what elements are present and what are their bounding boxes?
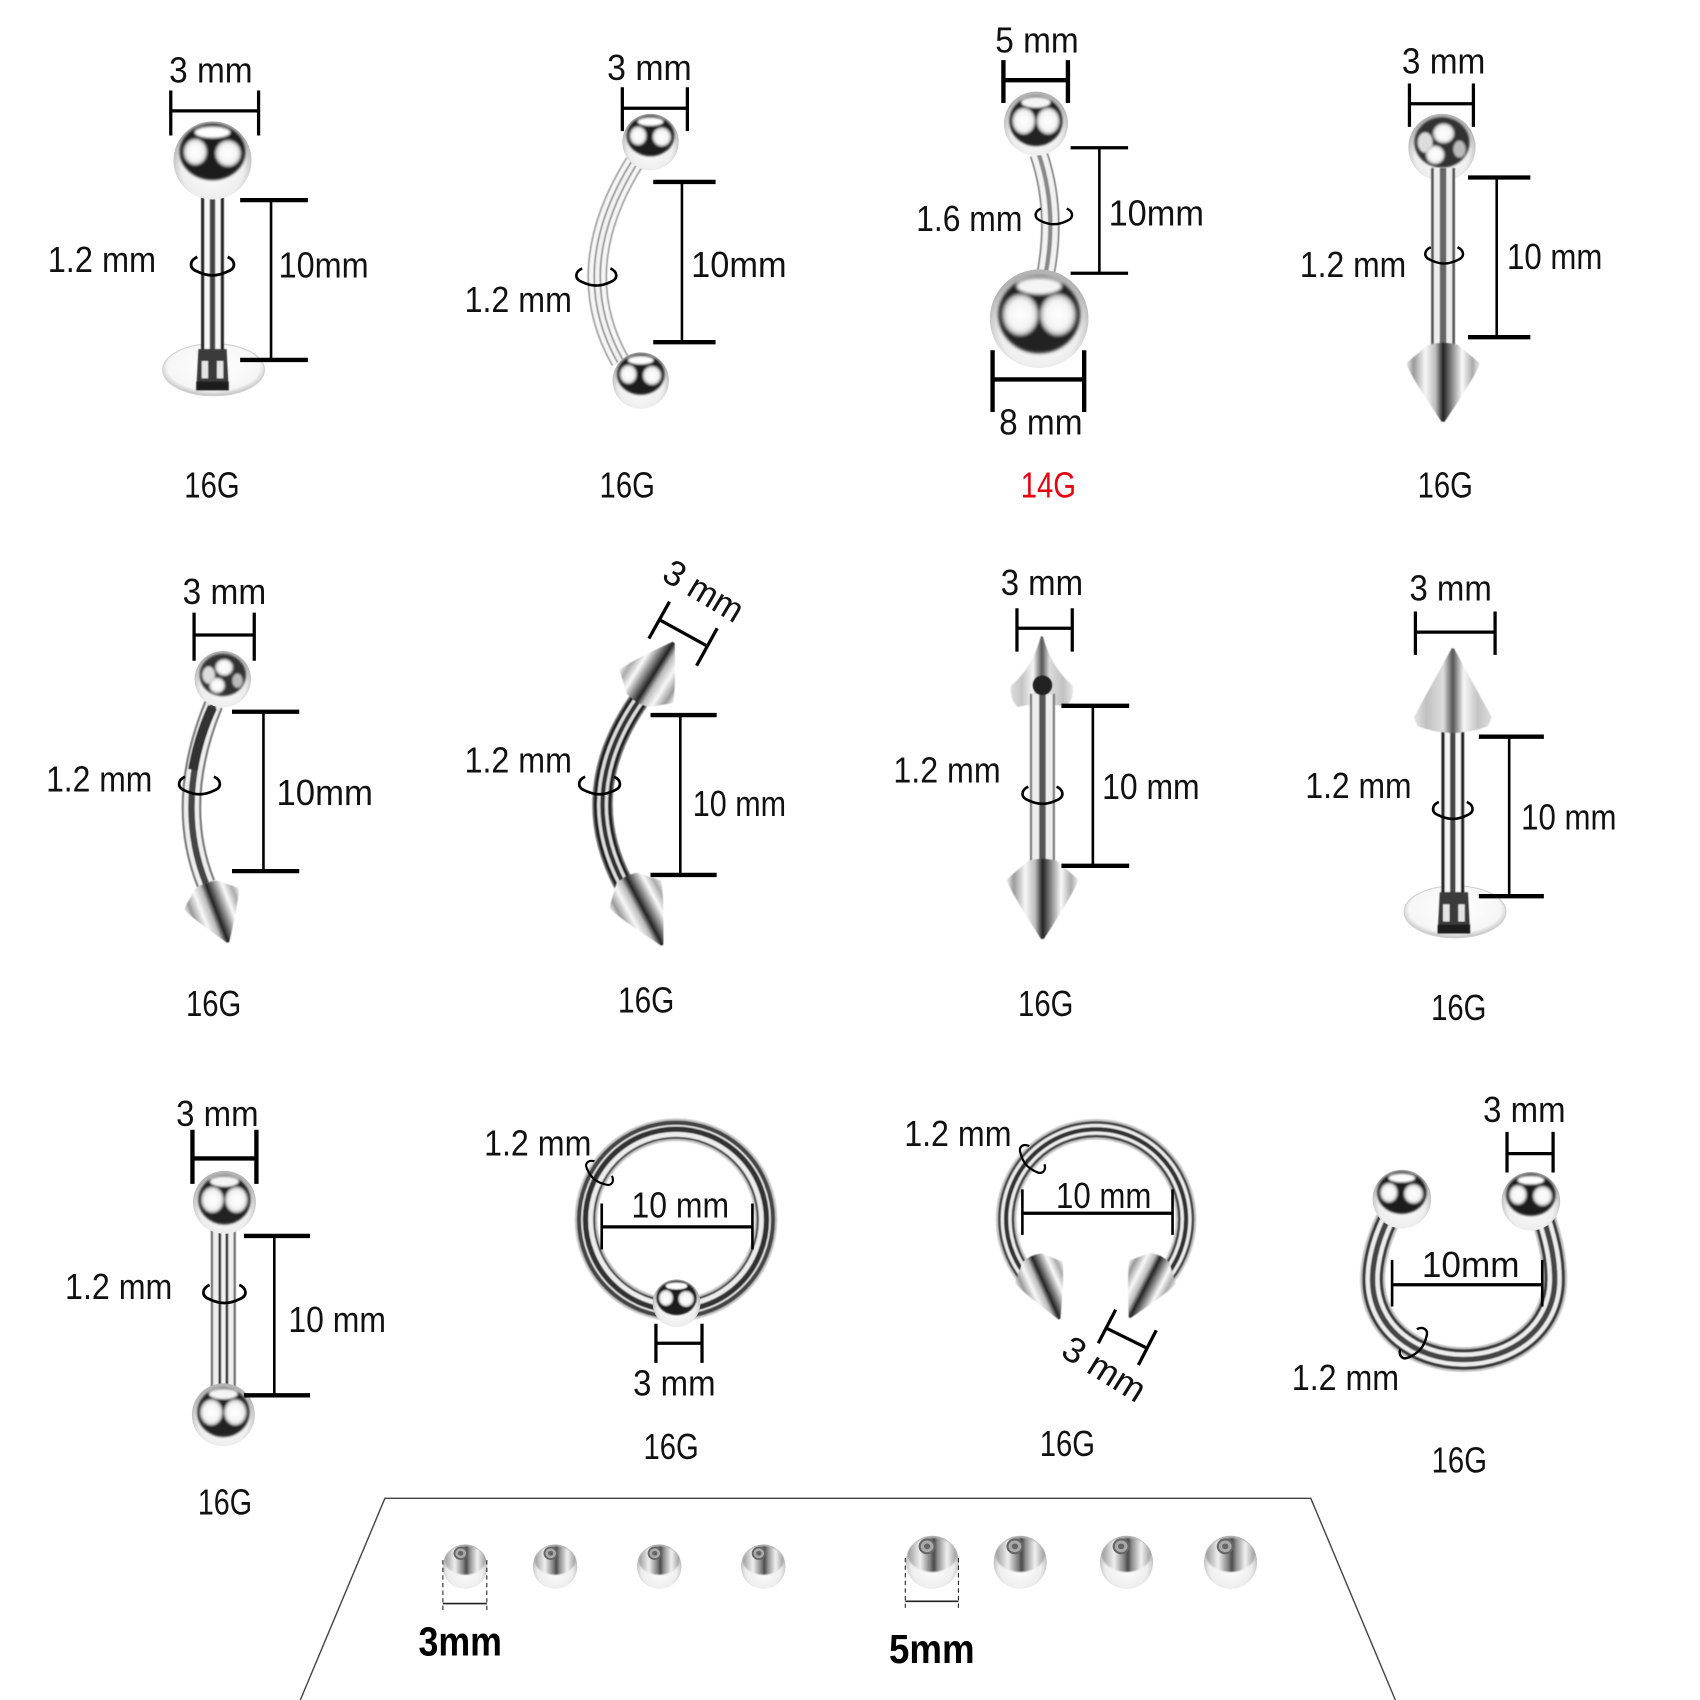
dimension 3mm	[192, 1130, 256, 1184]
top spike	[1011, 636, 1073, 707]
curved bar	[191, 705, 214, 884]
gauge: 16G	[643, 1427, 699, 1467]
gauge: 16G	[1432, 1440, 1487, 1480]
label 1.2mm: 1.2 mm	[48, 240, 156, 280]
label 5mm: 5mm	[889, 1626, 975, 1672]
item: captive bead ring 16G	[484, 1124, 767, 1467]
dimension 3mm	[171, 91, 259, 136]
label 1.2mm: 1.2 mm	[484, 1124, 591, 1164]
bar	[202, 193, 223, 358]
label 10mm: 10 mm	[1507, 237, 1602, 277]
dimension 3mm	[194, 613, 254, 661]
label 3mm: 3 mm	[176, 1094, 259, 1134]
label 10mm: 10 mm	[1056, 1176, 1151, 1216]
gauge: 16G	[1431, 988, 1486, 1028]
label 1.2mm: 1.2 mm	[893, 750, 1001, 790]
gauge: 16G	[198, 1483, 252, 1523]
label 10mm: 10 mm	[1521, 797, 1617, 837]
dimension 10mm	[1468, 177, 1530, 337]
item: curved ball and spike 16G	[46, 572, 373, 1024]
label 10mm: 10mm	[276, 773, 373, 813]
top ball	[1004, 92, 1068, 156]
spike	[1414, 648, 1492, 733]
spike	[1406, 343, 1480, 422]
dimension 3mm	[1017, 608, 1072, 652]
ring marker	[203, 1285, 245, 1303]
dimension 8mm	[993, 350, 1084, 412]
gauge 14G red: 14G	[1021, 466, 1076, 506]
label 1.2mm: 1.2 mm	[1292, 1358, 1399, 1398]
ring marker	[1397, 1325, 1432, 1363]
bottom ball	[613, 352, 669, 409]
dimension 3mm	[656, 1324, 702, 1363]
label 1.2mm: 1.2 mm	[65, 1267, 172, 1307]
item: curved double spike 16G	[465, 552, 786, 1021]
ring marker	[582, 1158, 615, 1189]
dimension 3mm rotated	[1098, 1310, 1156, 1365]
label 3mm: 3 mm	[633, 1363, 716, 1403]
panel: spare balls tray	[300, 1498, 1395, 1700]
bottom spike	[600, 863, 688, 959]
label 3mm: 3 mm	[183, 572, 266, 612]
ring marker	[1015, 1142, 1048, 1177]
horseshoe bar	[1373, 1220, 1555, 1360]
gauge: 16G	[600, 466, 655, 506]
label 3mm rotated: 3 mm	[1055, 1328, 1153, 1410]
label 3mm rotated: 3 mm	[656, 552, 751, 630]
dimension 10mm	[1392, 1260, 1542, 1306]
captive ball	[653, 1279, 700, 1327]
label 10mm: 10 mm	[632, 1186, 729, 1226]
dimension 10mm	[232, 712, 299, 871]
item: ball and spike barbell 16G	[1300, 42, 1602, 506]
right ball	[1502, 1172, 1560, 1231]
ball	[195, 651, 251, 707]
label 10mm: 10 mm	[1102, 767, 1200, 807]
dimension 5mm	[1003, 60, 1068, 103]
label 10mm: 10mm	[279, 246, 369, 286]
dimension 10mm	[244, 1236, 310, 1395]
dimension 3mm	[1507, 1132, 1553, 1173]
item: horseshoe with spikes 16G	[904, 1114, 1186, 1464]
gauge: 16G	[1418, 466, 1473, 506]
top ball	[193, 1171, 256, 1234]
bottom spike	[1007, 859, 1078, 939]
dimension 10mm	[1061, 706, 1129, 866]
label 8mm: 8 mm	[999, 402, 1083, 442]
left ball	[1373, 1170, 1431, 1228]
label 1.2mm: 1.2 mm	[46, 759, 152, 799]
item: belly ring 14G	[916, 20, 1204, 506]
bottom ball	[990, 269, 1089, 368]
label 3mm: 3 mm	[1402, 42, 1485, 82]
curved bar	[597, 163, 634, 361]
ring marker	[191, 257, 234, 275]
spike	[178, 873, 255, 953]
dimension 3mm	[1409, 83, 1473, 127]
bottom ball	[192, 1383, 255, 1446]
item: labret spike 16G	[1305, 569, 1617, 1028]
dimension 10mm	[240, 200, 308, 360]
bar	[212, 1225, 235, 1393]
label 3mm: 3 mm	[1409, 569, 1492, 609]
ring marker	[576, 268, 616, 286]
gauge: 16G	[186, 984, 241, 1024]
label 3mm: 3 mm	[169, 50, 253, 90]
label 10mm: 10mm	[1422, 1245, 1519, 1285]
dimension 10mm	[651, 715, 717, 875]
gauge: 16G	[618, 981, 674, 1021]
base disc	[1404, 886, 1506, 938]
top spike base shadow	[1033, 675, 1052, 695]
item: straight double spike 16G	[893, 563, 1200, 1024]
label 1.2mm: 1.2 mm	[465, 740, 572, 780]
ring marker	[1425, 247, 1463, 264]
dimension 3mm	[1415, 611, 1495, 655]
base disc	[163, 344, 265, 396]
dimension 10mm	[1071, 148, 1128, 273]
ring marker	[179, 777, 220, 794]
top spike	[610, 626, 700, 718]
bar	[1442, 724, 1463, 900]
label 3mm: 3 mm	[1001, 563, 1083, 603]
label 10mm: 10 mm	[288, 1300, 386, 1340]
label 3mm: 3 mm	[1483, 1090, 1566, 1130]
tray outline	[300, 1498, 1395, 1700]
label 1.6mm: 1.6 mm	[916, 199, 1022, 239]
ring marker	[579, 777, 620, 794]
thread	[196, 349, 229, 390]
dimension 3mm	[622, 87, 687, 131]
label 5mm: 5 mm	[995, 20, 1079, 60]
dimension 3mm dashed	[443, 1560, 487, 1613]
item: straight barbell 16G	[65, 1094, 386, 1523]
dimension 5mm dashed	[905, 1558, 958, 1610]
label 10mm: 10 mm	[693, 784, 786, 824]
item: labret ball 3mm 16G	[48, 50, 369, 506]
dimension 3mm rotated	[649, 602, 717, 666]
gauge: 16G	[1018, 984, 1073, 1024]
bar	[1432, 168, 1454, 352]
top ball	[622, 114, 679, 170]
5mm balls	[906, 1536, 1257, 1589]
horseshoe bar	[1006, 1129, 1186, 1283]
thread	[1438, 892, 1470, 933]
ring marker	[1036, 209, 1072, 224]
gauge: 16G	[1040, 1424, 1095, 1464]
item: curved barbell 16G	[465, 48, 787, 506]
bar	[1031, 694, 1054, 873]
label 10mm: 10mm	[1109, 194, 1204, 234]
right spike	[1106, 1244, 1184, 1329]
label 1.2mm: 1.2 mm	[1300, 245, 1406, 285]
dimension 10mm	[653, 182, 716, 342]
ball	[1408, 114, 1476, 181]
label 1.2mm: 1.2 mm	[465, 280, 572, 320]
dimension 10mm	[1479, 737, 1544, 896]
curved bar	[602, 699, 640, 884]
item: horseshoe with balls 16G	[1292, 1090, 1566, 1480]
label 10mm: 10mm	[691, 245, 787, 285]
gauge: 16G	[184, 466, 240, 506]
ring marker	[1023, 787, 1062, 804]
ball	[173, 121, 252, 199]
left spike	[1008, 1246, 1083, 1330]
ring	[585, 1129, 767, 1310]
bar	[1039, 154, 1050, 276]
ring marker	[1433, 802, 1473, 819]
3mm balls	[443, 1544, 785, 1589]
label 1.2mm: 1.2 mm	[904, 1114, 1012, 1154]
label 3mm: 3mm	[418, 1619, 502, 1665]
label 3mm: 3 mm	[607, 48, 692, 88]
label 1.2mm: 1.2 mm	[1305, 766, 1412, 806]
dimension 10mm	[1022, 1189, 1173, 1235]
dimension 10mm	[602, 1203, 752, 1250]
